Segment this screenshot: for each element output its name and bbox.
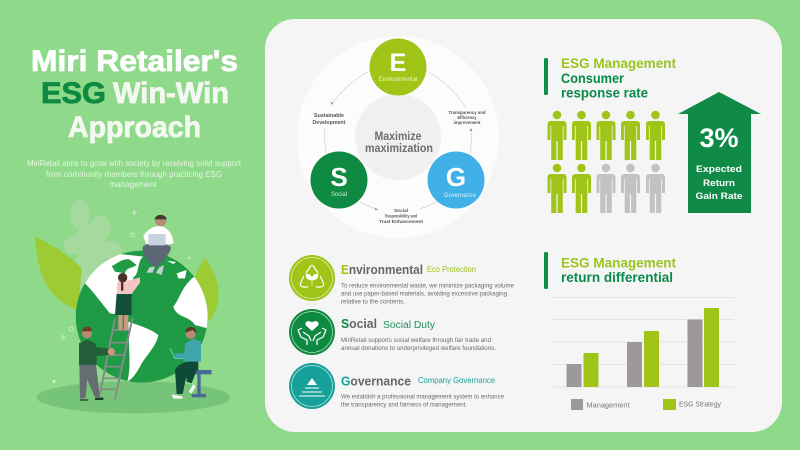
- node: Governance: G: [446, 162, 466, 192]
- sparkles: [53, 210, 190, 383]
- label: social responsibility: Responsibility and: [385, 214, 417, 218]
- label: social responsibility: [379, 208, 424, 224]
- bar chart: [552, 298, 734, 410]
- centre label: [365, 131, 433, 155]
- node: Social: S: [330, 162, 348, 192]
- arrow callout: 3%: 3%: [699, 123, 739, 153]
- woman on ladder: [115, 273, 140, 330]
- intro text: MiriRetail aims to grow with society by receiving solid support: [27, 158, 242, 168]
- label: transparency: [448, 110, 486, 125]
- body text: [341, 282, 514, 306]
- ladder: [100, 318, 132, 399]
- centre label: maximization: [365, 143, 433, 155]
- title: ESG: [41, 77, 106, 110]
- section: Social: [289, 309, 496, 355]
- title: Win-Win: [113, 77, 229, 110]
- body text: relative to the contents.: [341, 298, 405, 306]
- label: sustainable development: Sustainable: [314, 113, 344, 119]
- heading: consumer response rate: ESG Management: [561, 56, 677, 71]
- heading: Social: [341, 316, 377, 331]
- pictogram: people: [548, 111, 665, 213]
- heading: Environmental: [341, 262, 423, 277]
- man at left: [79, 327, 115, 401]
- ESG cycle diagram: [297, 36, 499, 238]
- node: Environmental: E: [390, 49, 406, 77]
- node: Governance: Governance: [444, 193, 477, 199]
- legend: [571, 399, 721, 410]
- icon: hands and heart: [289, 309, 335, 355]
- section: Governance: [289, 363, 504, 409]
- connecting arrows: [325, 71, 472, 210]
- heading: consumer response rate: [544, 56, 677, 100]
- legend: ESG Strategy: [679, 400, 721, 408]
- heading: return differential: [544, 252, 677, 289]
- intro text: from community members through practicing ESG: [46, 169, 222, 179]
- label: social responsibility: Trust Enhancement: [379, 219, 424, 224]
- illustration: globe and people: [35, 200, 230, 413]
- title: [31, 45, 238, 144]
- node: Governance: [428, 152, 484, 208]
- node: Environmental: [370, 38, 426, 96]
- label: transparency: Transparency and: [448, 110, 486, 115]
- label: transparency: improvement: [454, 120, 481, 125]
- heading: consumer response rate: response rate: [561, 86, 648, 100]
- right leaf: [195, 258, 219, 322]
- label: transparency: Efficiency: [458, 115, 477, 120]
- main white panel: [265, 19, 782, 432]
- body text: We establish a professional management system to enhance: [341, 394, 504, 400]
- icon: pyramid: [289, 363, 335, 409]
- heading: consumer response rate: Consumer: [561, 71, 625, 86]
- legend: Management: [586, 400, 630, 410]
- outer ring: [297, 36, 499, 238]
- subheading: Social Duty: [383, 320, 435, 331]
- seated person with laptop: [170, 327, 212, 399]
- subheading: Company Governance: [418, 375, 495, 385]
- label: sustainable development: Development: [312, 120, 346, 126]
- node: Environmental: Environmental: [378, 77, 418, 83]
- icon: recycle and sprout: [289, 255, 335, 301]
- ground shadow: [37, 381, 230, 413]
- intro text: management: [110, 179, 157, 189]
- intro text: [27, 158, 242, 189]
- arrow callout: 3%: Expected: [696, 164, 742, 175]
- arrow callout: 3%: Return: [703, 178, 735, 189]
- body text: annual donations to underprivileged welfare foundations.: [341, 345, 496, 352]
- body text: [341, 337, 496, 352]
- heading: return differential: ESG Management: [561, 256, 677, 270]
- label: social responsibility: Social: [394, 208, 408, 213]
- arrow callout: 3%: [678, 92, 761, 213]
- left leaf: [35, 237, 82, 311]
- node: Social: Social: [331, 192, 347, 198]
- title: Miri Retailer's: [31, 45, 238, 78]
- section: Environmental: [289, 255, 514, 306]
- heading: Governance: [341, 374, 411, 388]
- arrow callout: 3%: Gain Rate: [696, 191, 742, 202]
- node: Social: [310, 152, 368, 208]
- body text: [341, 394, 504, 408]
- body text: the transparency and fairness of management.: [341, 402, 467, 408]
- globe: [76, 251, 213, 383]
- centre label: Maximize: [374, 131, 422, 143]
- title: Approach: [68, 111, 201, 144]
- heading: return differential: return differential: [561, 270, 673, 285]
- person on top with laptop: [143, 215, 173, 275]
- body text: MiriRetail supports social welfare through fair trade and: [341, 337, 491, 344]
- body text: To reduce environmental waste, we minimize packaging volume: [341, 282, 514, 290]
- subheading: Eco Protection: [427, 264, 476, 274]
- label: sustainable development: [312, 113, 346, 126]
- body text: and use paper-based materials, avoiding excessive packaging: [341, 290, 507, 298]
- inner circle: [355, 94, 441, 180]
- pale leaf: [63, 200, 122, 288]
